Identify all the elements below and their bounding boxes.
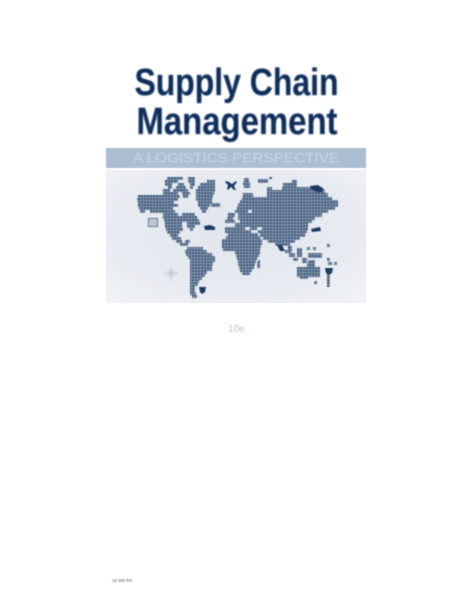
map panel [106,170,366,303]
north america [137,177,200,246]
subtitle banner [106,148,366,168]
title: Management [136,101,338,143]
icon: compass star [163,267,179,280]
icon: package box [148,218,158,226]
greenland [196,180,215,213]
printer code: 10 W6 R4 [112,578,132,583]
icon: airplane [225,181,237,190]
dark location marks [199,185,333,294]
subtitle banner: A LOGISTICS PERSPECTIVE [133,150,339,166]
title: Supply Chain [134,62,338,104]
eurasia [225,180,338,252]
south america [185,247,215,298]
edition label: 10e [228,324,245,335]
africa [222,230,262,275]
australia [297,263,320,279]
islands [211,177,337,287]
title [134,62,338,143]
world map [137,177,338,298]
